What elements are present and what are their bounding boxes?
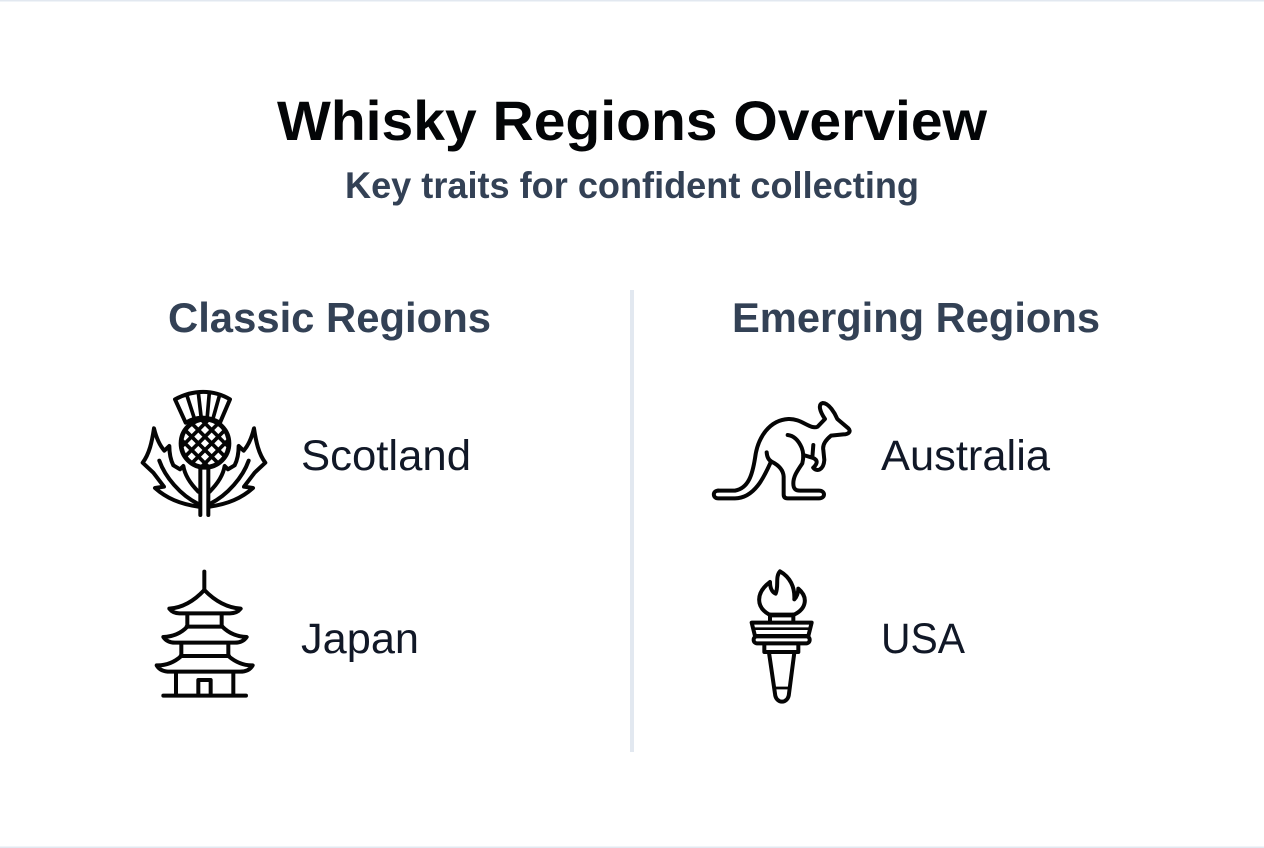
heading: classic regions: Classic Regions <box>168 294 491 341</box>
vertical divider <box>630 290 634 752</box>
label: Australia: Australia <box>881 432 1050 480</box>
subtitle: Key traits for confident collecting <box>345 165 919 206</box>
heading: emerging regions: Emerging Regions <box>732 294 1100 341</box>
label: USA: USA <box>881 615 965 663</box>
icon: torch <box>752 571 812 702</box>
title: Whisky Regions Overview <box>277 89 987 152</box>
icon: thistle <box>140 390 268 517</box>
label: Scotland: Scotland <box>301 432 471 480</box>
icon: kangaroo <box>714 403 850 498</box>
icon: pagoda <box>157 572 253 696</box>
panel: classic regions <box>143 294 491 696</box>
panel: emerging regions <box>714 294 1100 702</box>
label: Japan: Japan <box>301 615 419 663</box>
